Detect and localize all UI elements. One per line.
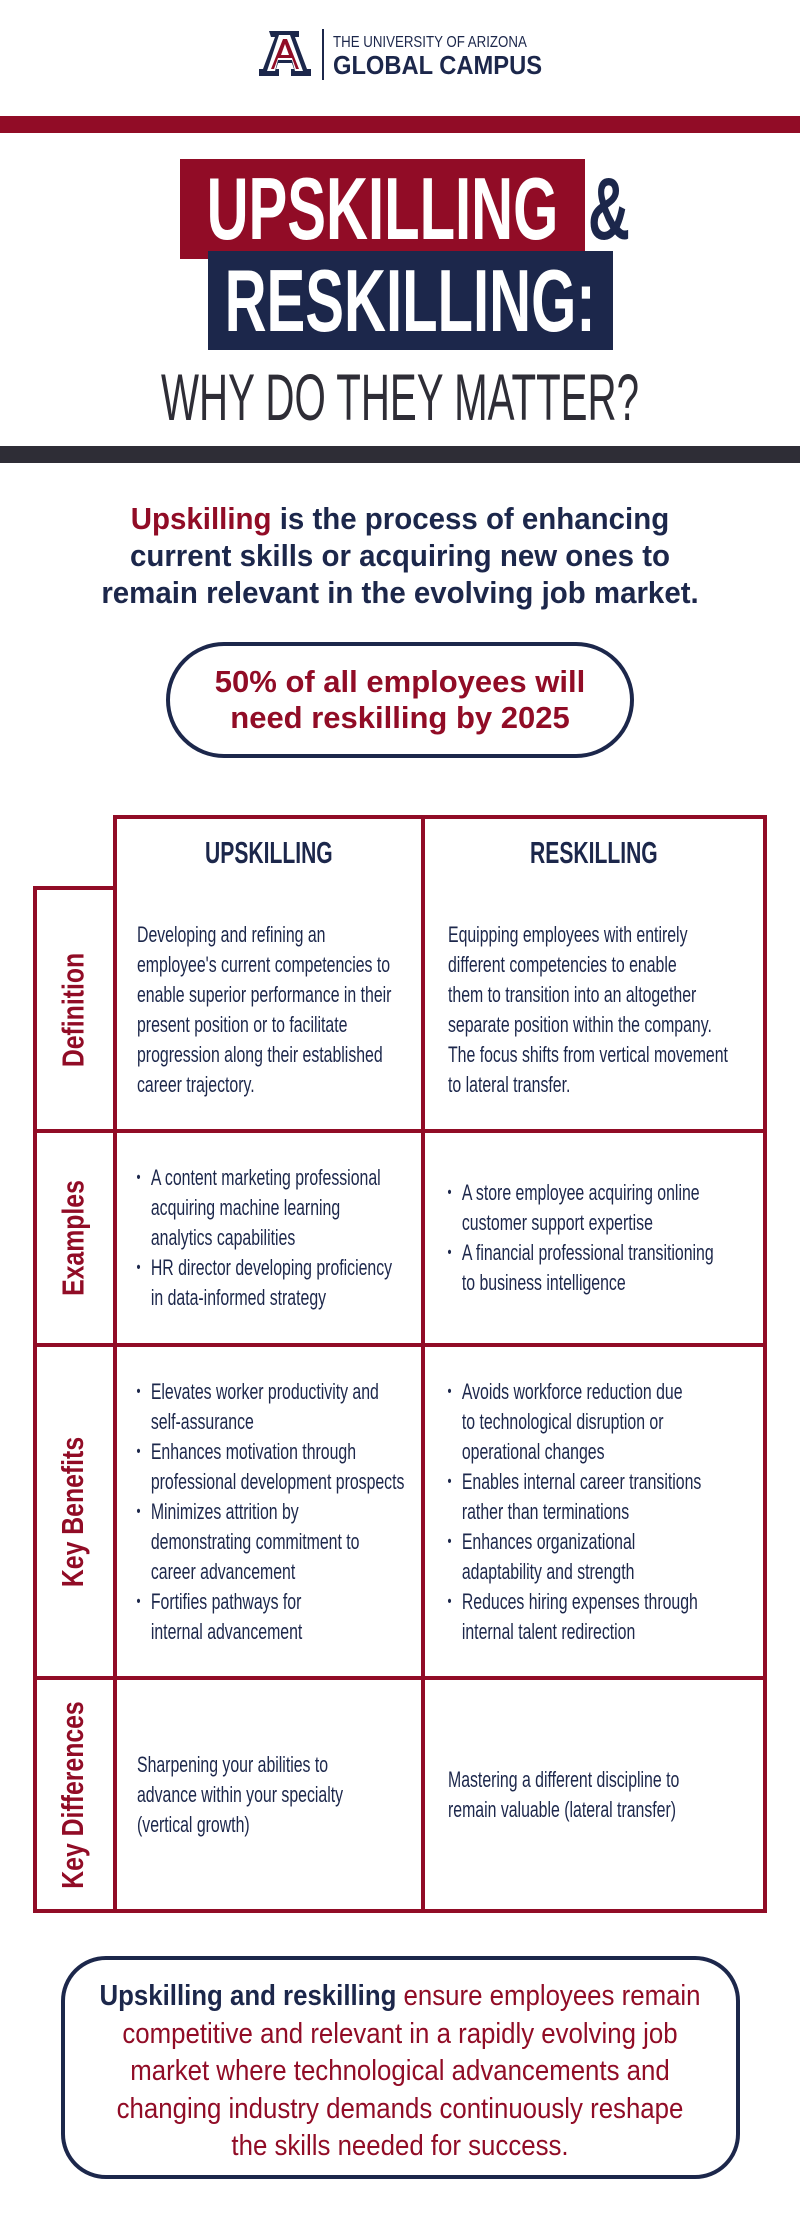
cell: reskilling benefits: Reduces hiring expenses through bbox=[462, 1588, 698, 1614]
cell: upskilling definition: Developing and refining an bbox=[137, 922, 325, 946]
callout pill: 50% of all employees will bbox=[215, 664, 585, 699]
definition statement: Upskilling is the process of enhancing bbox=[131, 501, 669, 536]
row label: key differences: Key Differences bbox=[55, 1701, 90, 1888]
cell: upskilling benefits: self-assurance bbox=[151, 1408, 254, 1434]
cell: upskilling examples bbox=[136, 1165, 392, 1310]
cell: reskilling definition: them to transition into an altogether bbox=[448, 982, 696, 1006]
cell: upskilling benefits: Minimizes attrition by bbox=[151, 1498, 299, 1524]
definition statement: current skills or acquiring new ones to bbox=[130, 538, 670, 573]
cell: upskilling benefits bbox=[136, 1378, 404, 1644]
cell: reskilling benefits bbox=[448, 1378, 701, 1644]
cell: reskilling examples: customer support expertise bbox=[462, 1210, 653, 1235]
title box: upskilling: UPSKILLING bbox=[207, 159, 558, 258]
cell: upskilling benefits: Elevates worker productivity and bbox=[151, 1378, 379, 1404]
subtitle: WHY DO THEY MATTER? bbox=[161, 360, 639, 434]
cell: reskilling examples: A financial professional transitioning bbox=[462, 1240, 714, 1265]
cell: upskilling definition bbox=[137, 922, 392, 1096]
cell: reskilling benefits: rather than terminations bbox=[462, 1498, 629, 1524]
cell: upskilling benefits: demonstrating commitment to bbox=[151, 1528, 359, 1554]
cell: reskilling benefits: to technological disruption or bbox=[462, 1408, 663, 1434]
cell: upskilling benefits: internal advancement bbox=[151, 1618, 302, 1644]
cell: upskilling definition: progression along their established bbox=[137, 1042, 383, 1066]
cell: upskilling examples: acquiring machine learning bbox=[151, 1195, 340, 1220]
cell: reskilling benefits: internal talent redirection bbox=[462, 1618, 635, 1644]
conclusion box: the skills needed for success. bbox=[231, 2130, 569, 2162]
conclusion box: market where technological advancements and bbox=[130, 2055, 670, 2087]
cell: upskilling benefits: Fortifies pathways for bbox=[151, 1588, 301, 1614]
cell: reskilling examples: to business intelligence bbox=[462, 1270, 626, 1295]
cell: reskilling examples bbox=[448, 1180, 714, 1295]
cell: upskilling differences: Sharpening your abilities to bbox=[137, 1752, 328, 1776]
definition statement bbox=[101, 501, 699, 610]
row label: examples: Examples bbox=[55, 1180, 90, 1296]
header: upskilling: UPSKILLING bbox=[205, 834, 333, 870]
cell: reskilling definition: Equipping employees with entirely bbox=[448, 922, 688, 946]
cell: reskilling definition: to lateral transfer. bbox=[448, 1072, 570, 1096]
title bbox=[161, 159, 639, 434]
cell: upskilling examples: HR director developing proficiency bbox=[151, 1255, 392, 1280]
header: reskilling: RESKILLING bbox=[530, 834, 658, 870]
cell: upskilling definition: career trajectory. bbox=[137, 1072, 255, 1096]
callout pill bbox=[166, 642, 634, 758]
cell: upskilling definition: present position or to facilitate bbox=[137, 1012, 347, 1036]
cell: reskilling benefits: operational changes bbox=[462, 1438, 605, 1464]
cell: upskilling differences bbox=[137, 1752, 343, 1836]
cell: reskilling benefits: Enables internal career transitions bbox=[462, 1468, 701, 1494]
cell: reskilling benefits: Avoids workforce reduction due bbox=[462, 1378, 683, 1404]
cell: upskilling benefits: professional development prospects bbox=[151, 1468, 404, 1494]
cell: upskilling examples: A content marketing professional bbox=[151, 1165, 381, 1190]
comparison table bbox=[33, 815, 767, 1913]
cell: upskilling differences: (vertical growth) bbox=[137, 1812, 250, 1836]
cell: reskilling benefits: adaptability and strength bbox=[462, 1558, 634, 1584]
logo bbox=[259, 29, 542, 80]
cell: upskilling benefits: career advancement bbox=[151, 1558, 295, 1584]
conclusion box: Upskilling and reskilling ensure employees remain bbox=[99, 1980, 701, 2012]
definition statement: remain relevant in the evolving job market. bbox=[101, 575, 699, 610]
title box: reskilling: RESKILLING: bbox=[225, 250, 596, 350]
conclusion box: competitive and relevant in a rapidly evolving job bbox=[122, 2018, 678, 2050]
cell: upskilling definition: employee's current competencies to bbox=[137, 952, 390, 976]
cell: upskilling benefits: Enhances motivation through bbox=[151, 1438, 356, 1464]
row label: key benefits: Key Benefits bbox=[55, 1436, 90, 1587]
cell: reskilling differences: Mastering a different discipline to bbox=[448, 1766, 679, 1792]
cell: reskilling benefits: Enhances organizational bbox=[462, 1528, 635, 1554]
cell: upskilling examples: in data-informed strategy bbox=[151, 1285, 326, 1310]
conclusion box bbox=[61, 1956, 740, 2179]
icon: block A bbox=[259, 31, 311, 76]
conclusion box: changing industry demands continuously reshape bbox=[117, 2092, 683, 2124]
callout pill: need reskilling by 2025 bbox=[230, 700, 570, 735]
cell: reskilling differences bbox=[448, 1766, 679, 1822]
cell: reskilling examples: A store employee acquiring online bbox=[462, 1180, 700, 1205]
row label: definition: Definition bbox=[55, 952, 90, 1067]
cell: upskilling definition: enable superior performance in their bbox=[137, 982, 391, 1006]
red bar bbox=[0, 116, 800, 133]
cell: reskilling definition: different competencies to enable bbox=[448, 952, 677, 976]
cell: upskilling differences: advance within your specialty bbox=[137, 1782, 343, 1806]
cell: reskilling definition: separate position within the company. bbox=[448, 1012, 712, 1036]
cell: reskilling differences: remain valuable (lateral transfer) bbox=[448, 1796, 676, 1822]
dark bar bbox=[0, 446, 800, 463]
logo text: THE UNIVERSITY OF ARIZONA bbox=[333, 34, 527, 51]
logo: GLOBAL CAMPUS bbox=[333, 52, 542, 80]
cell: reskilling definition bbox=[448, 922, 728, 1096]
cell: upskilling examples: analytics capabilities bbox=[151, 1225, 295, 1250]
ampersand: & bbox=[588, 159, 630, 258]
cell: reskilling definition: The focus shifts from vertical movement bbox=[448, 1042, 728, 1066]
